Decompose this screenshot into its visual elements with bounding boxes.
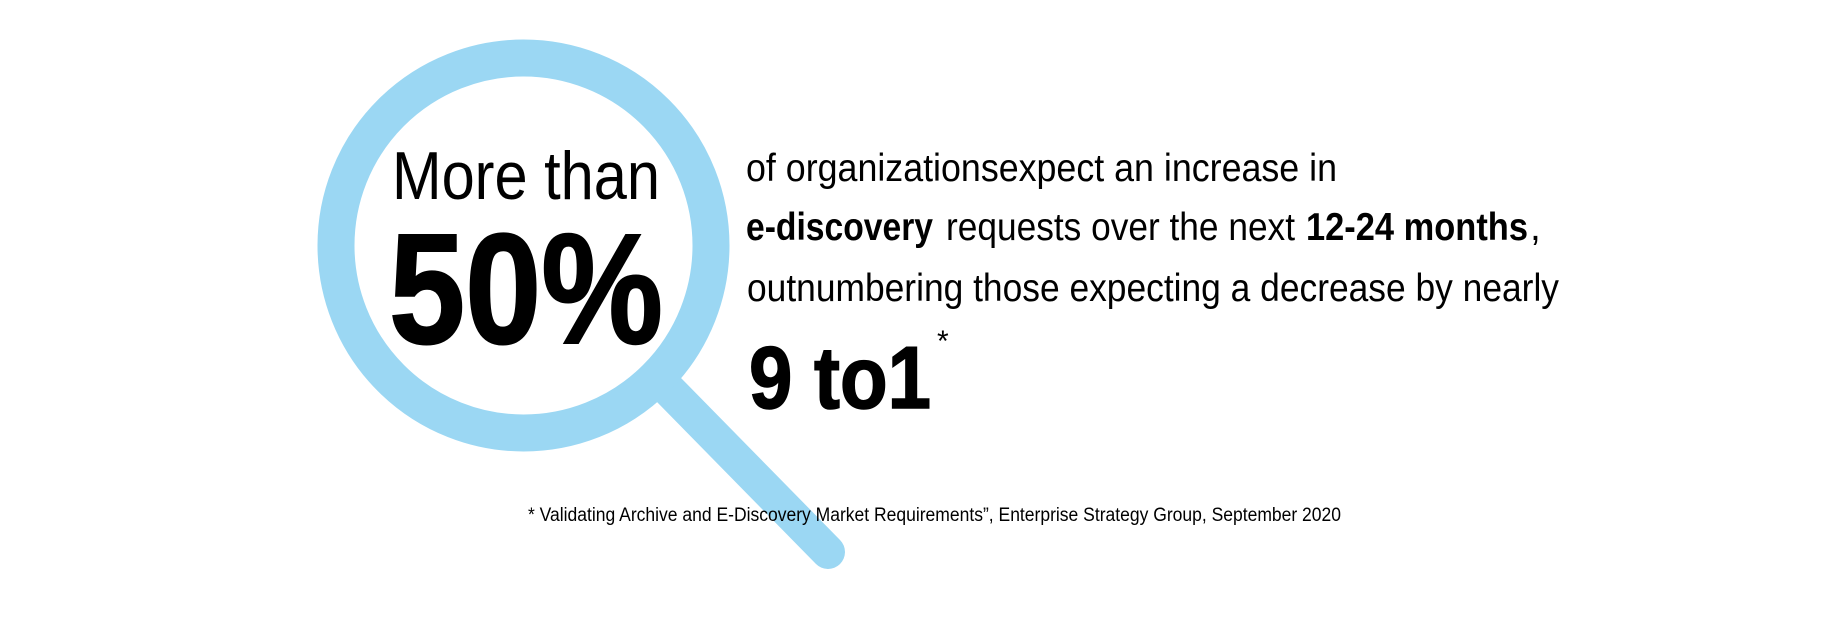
magnifier ring xyxy=(336,58,711,433)
50 percent: 50% xyxy=(389,202,663,377)
statistic: 9 to 1: * xyxy=(937,325,949,358)
more than: More than xyxy=(392,138,660,214)
magnifier handle xyxy=(669,390,828,552)
statistic: 9 to 1: 9 to1 xyxy=(749,328,931,427)
line 2: requests over the next xyxy=(946,206,1295,249)
line 3: outnumbering those expecting a decrease by nearly xyxy=(747,267,1559,310)
body text xyxy=(746,147,1559,310)
footnote: * Validating Archive and E-Discovery Market Requirements”, Enterprise Strategy Group, September 2020 xyxy=(528,505,1341,526)
line 1: of organizationsexpect an increase in xyxy=(746,147,1337,190)
line 2: e-discovery xyxy=(746,206,933,249)
line 2: , xyxy=(1530,206,1541,249)
icon: magnifying glass xyxy=(336,58,828,552)
headline: more than 50% xyxy=(389,138,663,377)
line 2 xyxy=(746,206,1541,249)
line 2: 12-24 months xyxy=(1306,206,1528,249)
